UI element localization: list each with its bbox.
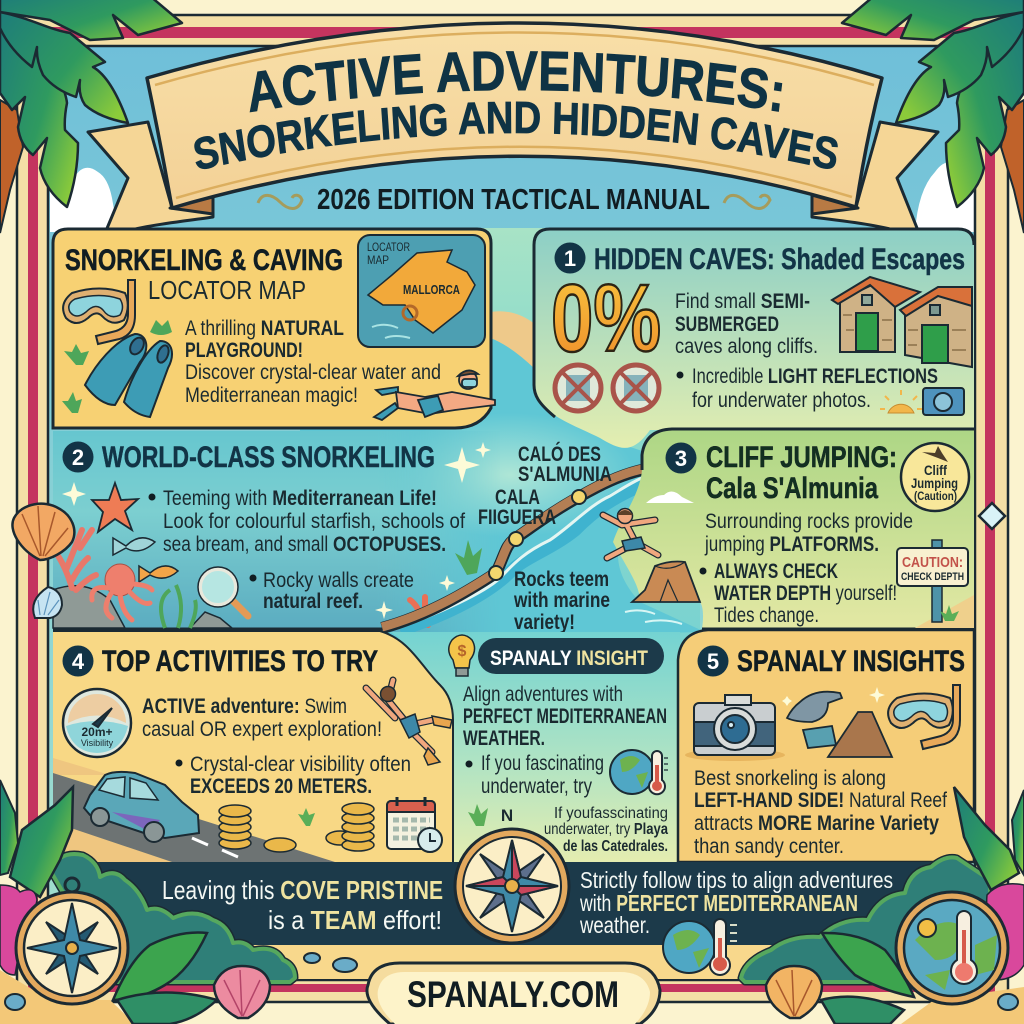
badge: cliff jumping caution: (Caution)	[914, 491, 957, 503]
icon: weather globe	[896, 892, 1008, 1004]
heading: TOP ACTIVITIES TO TRY	[102, 645, 378, 678]
icon: prohibited signs	[555, 365, 659, 411]
map inset: MAP	[367, 255, 389, 267]
icon: globe and thermometer	[610, 750, 668, 794]
water ripples	[625, 610, 682, 624]
icon: scallop shell	[12, 504, 74, 560]
icon: dive mask and snorkel	[63, 280, 135, 344]
panel: hidden caves: Incredible LIGHT REFLECTIONS	[692, 365, 938, 388]
panel: top activities: Crystal-clear visibility often	[190, 753, 411, 776]
sand wedges	[53, 758, 172, 862]
panel: cliff jumping: Tides change.	[714, 604, 819, 627]
panel: spanaly insights: LEFT-HAND SIDE! Natural Reef	[694, 789, 947, 812]
panel: spanaly insights: than sandy center.	[694, 835, 844, 858]
icon: visibility gauge: 20m+	[81, 725, 113, 739]
icon: rocks	[53, 586, 232, 628]
cloud	[646, 491, 694, 503]
icon: diver	[366, 680, 452, 765]
number badge: 5	[707, 649, 719, 674]
dark footer band	[95, 862, 935, 945]
compass letter: N	[501, 806, 513, 825]
panel: world-class snorkeling	[12, 431, 500, 632]
icon: swimmer	[374, 370, 495, 420]
panel: world-class snorkeling: Look for colourful starfish, schools of	[163, 510, 465, 533]
icon: caution sign: CAUTION:	[902, 554, 963, 571]
body text: A thrilling NATURAL	[185, 317, 344, 340]
ornaments	[258, 195, 770, 208]
badge: cliff jumping caution	[901, 443, 969, 511]
callout: rocks teem: Rocks teem	[514, 568, 609, 591]
number badge	[62, 442, 94, 472]
sand patches	[490, 311, 536, 398]
bottom-right foliage	[741, 787, 1024, 1024]
panel: locator map intro: Mediterranean magic!	[185, 384, 358, 407]
panel: cliff jumping: Cala S'Almunia	[706, 472, 878, 505]
icon: light bulb: $	[458, 643, 467, 660]
icon: light bulb	[449, 635, 475, 676]
callout: rocks teem: variety!	[514, 611, 575, 634]
leaf: middle frond	[0, 12, 128, 123]
icon: visibility gauge: Visibility	[81, 738, 114, 748]
dark footer band: is a TEAM effort!	[268, 905, 442, 935]
icon: sun	[880, 390, 922, 413]
title banner	[145, 21, 884, 210]
sand corner	[915, 595, 974, 628]
water column	[300, 228, 700, 648]
icon: pink shell	[214, 966, 270, 1018]
river	[300, 338, 705, 640]
body text	[148, 494, 156, 500]
title line 2: SNORKELING AND HIDDEN CAVES	[194, 102, 838, 170]
number badge	[666, 442, 696, 474]
badge: cliff jumping caution: Cliff	[924, 463, 947, 478]
icon: camera	[923, 388, 964, 415]
leaf: lower frond, right	[946, 20, 1024, 207]
road	[53, 773, 335, 862]
icon: plant	[940, 605, 959, 621]
panel: world-class snorkeling: natural reef.	[263, 590, 363, 613]
number badge: 4	[72, 649, 85, 674]
panel: top activities: EXCEEDS 20 METERS.	[190, 775, 372, 798]
left message: Leaving this COVE PRISTINE	[162, 875, 443, 905]
heading: SPANALY INSIGHTS	[737, 645, 965, 678]
icon: caution sign: CHECK DEPTH	[901, 571, 964, 583]
panel: cliff jumping: ALWAYS CHECK	[714, 560, 838, 583]
icon: rock	[828, 712, 892, 757]
number badge: 2	[72, 445, 84, 470]
body text: Align adventures with	[463, 683, 623, 706]
website pill	[367, 963, 660, 1024]
panel: top activities	[53, 631, 453, 862]
palm top-right	[842, 0, 1024, 233]
panel: world-class snorkeling: sea bream, and small OCTOPUSES.	[163, 533, 446, 556]
icon: left compass	[16, 878, 128, 1004]
badge: cliff jumping caution: Jumping	[911, 476, 958, 491]
map inset: MALLORCA	[403, 283, 460, 297]
icon: plant	[455, 540, 482, 575]
sparkles	[782, 687, 885, 706]
panel: cliff jumping: WATER DEPTH yourself!	[714, 582, 897, 605]
number badge: 1	[564, 246, 576, 271]
place labels: CALÓ DES	[518, 442, 601, 466]
icon: globe and thermometer	[663, 919, 737, 975]
icon: car	[84, 772, 199, 842]
place labels: CALA	[495, 486, 540, 509]
subheading: LOCATOR MAP	[148, 275, 306, 305]
panel: locator map intro	[53, 229, 495, 428]
panel: spanaly insight column: underwater, try	[481, 775, 592, 798]
palm top-left	[0, 0, 182, 233]
dark footer band: weather.	[579, 912, 650, 938]
icon: caution sign	[897, 540, 968, 622]
panel: hidden caves: SUBMERGED	[675, 313, 779, 336]
heading: SNORKELING & CAVING	[65, 244, 343, 277]
icon: center compass	[455, 829, 569, 943]
place labels: S'ALMUNIA	[518, 463, 612, 486]
map inset: LOCATOR	[367, 242, 410, 254]
panel: spanaly insight column: de las Catedrales.	[563, 838, 668, 855]
bottom-left foliage	[0, 780, 295, 1024]
body text: ACTIVE adventure: Swim	[142, 695, 347, 718]
pebbles	[304, 953, 357, 972]
icon: magnifier	[198, 567, 248, 616]
panel: spanaly insights	[678, 630, 974, 862]
heading: CLIFF JUMPING:	[706, 441, 897, 474]
icon: plant	[298, 808, 315, 826]
icon: calendar and clock	[387, 797, 442, 852]
banner tails	[88, 122, 938, 238]
panel: locator map intro: PLAYGROUND!	[185, 339, 303, 362]
icon: camera	[685, 695, 785, 761]
tip text: If youfasscinating	[554, 805, 668, 822]
pebble: right	[998, 994, 1018, 1010]
body text: Surrounding rocks provide	[705, 510, 913, 533]
icon: jumper	[603, 508, 658, 558]
callout: rocks teem: with marine	[513, 589, 610, 612]
icon: fins	[85, 334, 172, 417]
right message: Strictly follow tips to align adventures	[580, 867, 893, 893]
subtitle: 2026 EDITION TACTICAL MANUAL	[317, 184, 710, 216]
icon: frame diamond	[979, 503, 1005, 529]
panel: locator map intro: Discover crystal-clear water and	[185, 361, 441, 384]
icon: blue shell	[33, 587, 62, 618]
pale water glow	[385, 413, 635, 537]
icon: starfish	[92, 483, 138, 532]
panel: spanaly insight column: PERFECT MEDITERRANEAN	[463, 705, 667, 728]
callout: rocks teem	[513, 568, 610, 634]
sparkles	[62, 442, 491, 619]
panel: top activities: casual OR expert exploration!	[142, 718, 382, 741]
panel: hidden caves: caves along cliffs.	[675, 335, 818, 358]
dark footer band: with PERFECT MEDITERRANEAN	[579, 890, 858, 916]
icon: cliff rock	[632, 562, 700, 602]
icon: coral	[56, 530, 96, 590]
number badge	[62, 646, 94, 676]
number badge: 3	[675, 446, 687, 471]
icon: orange coral	[410, 597, 442, 625]
number badge	[698, 646, 728, 676]
panel: cliff jumping	[603, 429, 974, 629]
icon: dive mask and snorkel	[888, 685, 960, 749]
panel: spanaly insights: attracts MORE Marine Variety	[694, 812, 939, 835]
panel: spanaly insight column: If you fascinating	[481, 752, 604, 775]
panel: spanaly insight column: underwater, try Playa	[544, 821, 668, 838]
heading: WORLD-CLASS SNORKELING	[102, 441, 435, 474]
leaf: middle frond, right	[896, 12, 1024, 123]
body text: Find small SEMI-	[675, 290, 810, 313]
big stat: 0%	[551, 265, 661, 372]
icon: stone houses	[832, 277, 972, 367]
place labels: FIIGUERA	[478, 506, 556, 529]
leaf: lower frond	[0, 20, 78, 207]
panel: cliff jumping: jumping PLATFORMS.	[704, 533, 879, 556]
sand strip below band	[50, 945, 973, 979]
icon: octopus	[92, 564, 152, 620]
icon: plants	[62, 320, 172, 413]
number badge	[554, 242, 586, 274]
icon: fish	[113, 538, 178, 582]
panel: spanaly insight column: WEATHER.	[463, 727, 545, 750]
icon: plant	[468, 804, 488, 826]
panel: world-class snorkeling: Rocky walls create	[263, 569, 414, 592]
leaf: top frond	[0, 0, 182, 40]
icon: coin stacks	[219, 803, 374, 852]
title line 1: ACTIVE ADVENTURES:	[250, 51, 782, 112]
panel: hidden caves: for underwater photos.	[692, 389, 871, 412]
website pill: SPANALY.COM	[407, 974, 619, 1015]
heading: HIDDEN CAVES: Shaded Escapes	[594, 243, 965, 276]
place labels	[478, 442, 612, 529]
pebble: left	[5, 994, 25, 1010]
route path with waypoints	[382, 469, 642, 630]
clouds	[50, 162, 975, 232]
panel: world-class snorkeling: Teeming with Mediterranean Life!	[163, 487, 437, 510]
icon: dolphin and stone	[787, 692, 842, 748]
panel: spanaly insight column	[390, 632, 680, 862]
pill heading: SPANALY INSIGHT	[490, 647, 648, 670]
pill heading	[478, 638, 664, 674]
leaf: top frond, right	[842, 0, 1024, 40]
body text: Best snorkeling is along	[694, 767, 886, 790]
icon: visibility gauge	[63, 689, 131, 757]
icon: seaweed	[161, 585, 196, 628]
map inset	[358, 235, 485, 347]
icon: orange shell	[766, 966, 822, 1018]
panel: hidden caves	[534, 229, 974, 448]
